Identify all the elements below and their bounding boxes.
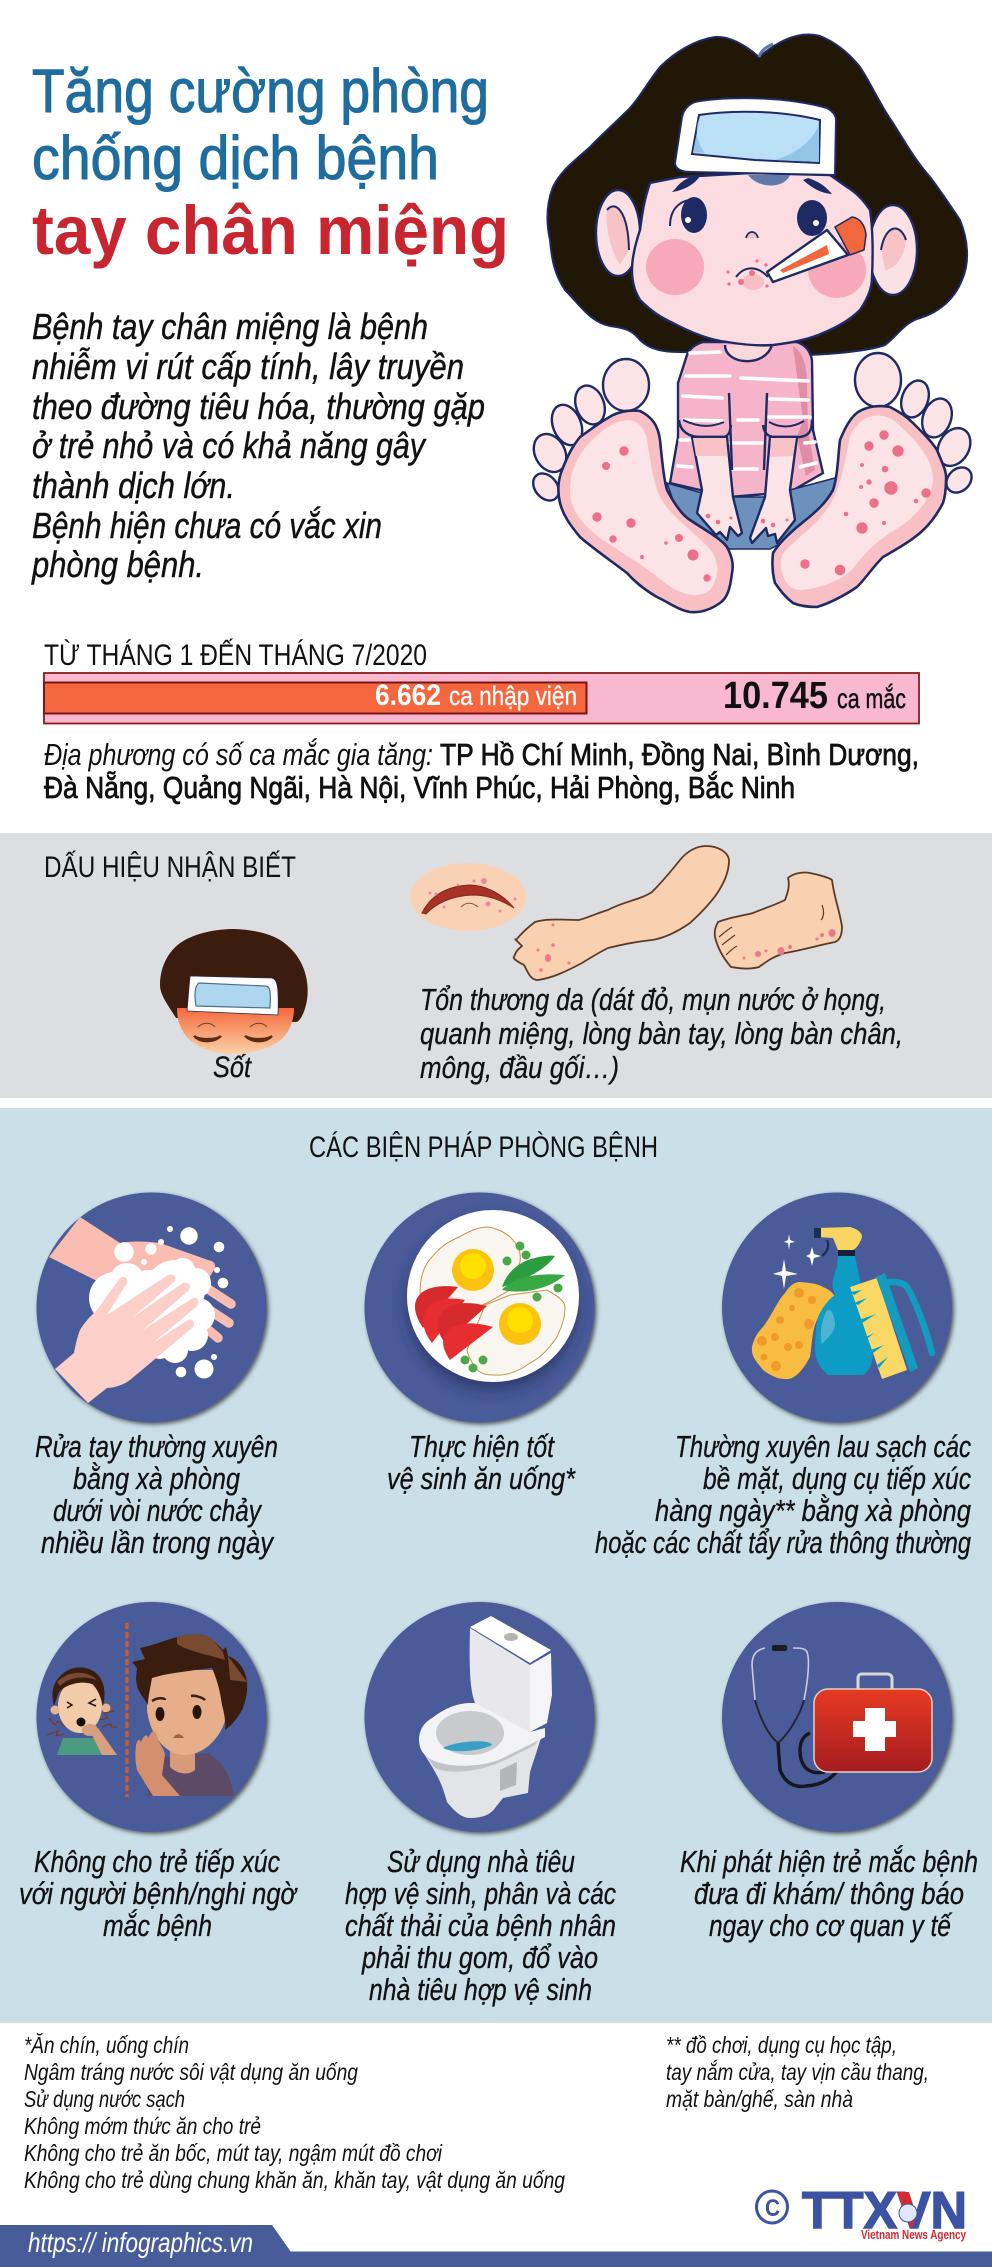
footnote: food safety: Không cho trẻ ăn bốc, mút tay, ngậm mút đồ chơi <box>24 2140 443 2166</box>
cooling pad on forehead <box>675 98 836 175</box>
footer banner with URL <box>0 2225 992 2267</box>
caption: sanitary toilet: nhà tiêu hợp vệ sinh <box>369 1972 592 2007</box>
title: Tăng cường phòng <box>32 57 489 125</box>
intro text block: phòng bệnh. <box>31 544 204 585</box>
caption: food hygiene: vệ sinh ăn uống* <box>387 1461 576 1496</box>
footnote: food safety: Không cho trẻ dùng chung khăn ăn, khăn tay, vật dụng ăn uống <box>24 2167 565 2193</box>
total cases label: 10.745 <box>723 675 828 717</box>
title: chống dịch bệnh <box>32 124 439 192</box>
footnote: surfaces: tay nắm cửa, tay vịn cầu thang, <box>666 2059 929 2085</box>
panel: symptoms <box>0 833 992 1098</box>
fever label: Sốt <box>213 1051 252 1084</box>
shorts <box>667 478 838 549</box>
title <box>32 57 509 269</box>
shirt <box>670 342 823 497</box>
skin lesions text: Tổn thương da (dát đỏ, mụn nước ở họng, <box>420 982 886 1017</box>
eyes <box>670 197 827 238</box>
icon: stethoscope and medical kit <box>722 1602 952 1832</box>
localities text: TP Hồ Chí Minh, Đồng Nai, Bình Dương, <box>440 737 919 772</box>
caption: sanitary toilet <box>345 1844 616 2007</box>
bar: hospitalised: 6.662 <box>375 679 441 712</box>
logo: TTXVN: TTXVN <box>802 2182 967 2240</box>
footnote: food safety: *Ăn chín, uống chín <box>24 2032 189 2058</box>
caption: hand washing: dưới vòi nước chảy <box>53 1493 263 1528</box>
footer banner with URL: https:// infographics.vn <box>28 2227 253 2258</box>
caption: avoid contact <box>19 1844 298 1943</box>
skin lesions text <box>420 982 903 1085</box>
caption: food hygiene <box>387 1429 576 1496</box>
caption: avoid contact: mắc bệnh <box>103 1908 212 1943</box>
title: tay chân miệng <box>32 192 509 269</box>
skin lesions text: quanh miệng, lòng bàn tay, lòng bàn chân, <box>420 1016 903 1051</box>
intro text block: ở trẻ nhỏ và có khả năng gây <box>32 425 427 466</box>
face <box>632 173 873 345</box>
caption: hand washing: bằng xà phòng <box>73 1461 240 1496</box>
caption: hand washing: Rửa tay thường xuyên <box>35 1429 278 1464</box>
caption: sanitary toilet: phải thu gom, đổ vào <box>361 1940 598 1975</box>
footnote: food safety <box>24 2032 565 2193</box>
intro text block: Bệnh hiện chưa có vắc xin <box>32 505 382 546</box>
bangs <box>672 176 832 194</box>
icon: toilet <box>364 1602 594 1832</box>
icon: mouth rash <box>410 863 526 931</box>
mouth rash <box>726 259 769 290</box>
prevention heading: CÁC BIỆN PHÁP PHÒNG BỆNH <box>309 1131 658 1164</box>
hair <box>547 34 967 355</box>
caption: hand washing: nhiều lần trong ngày <box>41 1525 275 1560</box>
intro text block <box>31 306 485 585</box>
caption: avoid contact: với người bệnh/nghi ngờ <box>19 1876 298 1911</box>
localities text: Đà Nẵng, Quảng Ngãi, Hà Nội, Vĩnh Phúc, Hải Phòng, Bắc Ninh <box>44 770 795 805</box>
caption: avoid contact: Không cho trẻ tiếp xúc <box>34 1844 280 1879</box>
stat period heading: TỪ THÁNG 1 ĐẾN THÁNG 7/2020 <box>44 638 427 672</box>
footnote: food safety: Ngâm tráng nước sôi vật dụng ăn uống <box>24 2059 358 2085</box>
localities text: Địa phương có số ca mắc gia tăng: <box>44 737 433 772</box>
footnote: food safety: Không mớm thức ăn cho trẻ <box>24 2113 261 2139</box>
footnote: surfaces: mặt bàn/ghế, sàn nhà <box>666 2086 853 2112</box>
intro text block: thành dịch lớn. <box>32 465 235 506</box>
icon: fever head <box>160 929 308 1054</box>
footnote: surfaces <box>666 2032 929 2112</box>
caption: sanitary toilet: hợp vệ sinh, phân và các <box>345 1876 616 1911</box>
toes <box>527 353 977 506</box>
caption: food hygiene: Thực hiện tốt <box>409 1429 555 1464</box>
intro text block: nhiễm vi rút cấp tính, lây truyền <box>32 346 464 387</box>
right sole <box>772 406 946 607</box>
illustration: sick child <box>527 34 977 612</box>
skin lesions text: mông, đầu gối…) <box>420 1050 619 1085</box>
intro text block: Bệnh tay chân miệng là bệnh <box>32 306 428 347</box>
bar: hospitalised: ca nhập viện <box>449 681 577 711</box>
ears <box>596 190 917 295</box>
cheeks <box>646 239 866 298</box>
arms and hands <box>692 437 797 543</box>
thermometer <box>767 217 866 282</box>
panel: prevention <box>0 1108 992 2023</box>
footnote: surfaces: ** đồ chơi, dụng cụ học tập, <box>666 2032 897 2058</box>
icon: hand washing <box>36 1192 266 1422</box>
icon: avoiding sick child <box>36 1602 266 1832</box>
localities text <box>44 737 919 805</box>
icon: foot with rash <box>715 873 842 969</box>
left sole <box>558 411 733 612</box>
bar: hospitalised <box>44 679 586 714</box>
icon: food plate <box>364 1192 594 1422</box>
intro text block: theo đường tiêu hóa, thường gặp <box>32 386 485 427</box>
caption: sanitary toilet: Sử dụng nhà tiêu <box>387 1844 575 1879</box>
caption: cleaning <box>595 1429 971 1560</box>
footnote: food safety: Sử dụng nước sạch <box>24 2086 185 2112</box>
total cases label <box>723 675 906 717</box>
symptoms heading: DẤU HIỆU NHẬN BIẾT <box>44 850 296 884</box>
bar chart: cases <box>44 673 919 724</box>
total cases label: ca mắc <box>837 683 906 714</box>
caption: sanitary toilet: chất thải của bệnh nhân <box>345 1908 616 1943</box>
caption: seek medical care <box>680 1844 978 1943</box>
logo: TTXVN: C <box>765 2195 780 2222</box>
caption: hand washing <box>35 1429 278 1560</box>
icon: arm with rash <box>514 846 729 980</box>
icon: cleaning supplies <box>722 1192 952 1422</box>
